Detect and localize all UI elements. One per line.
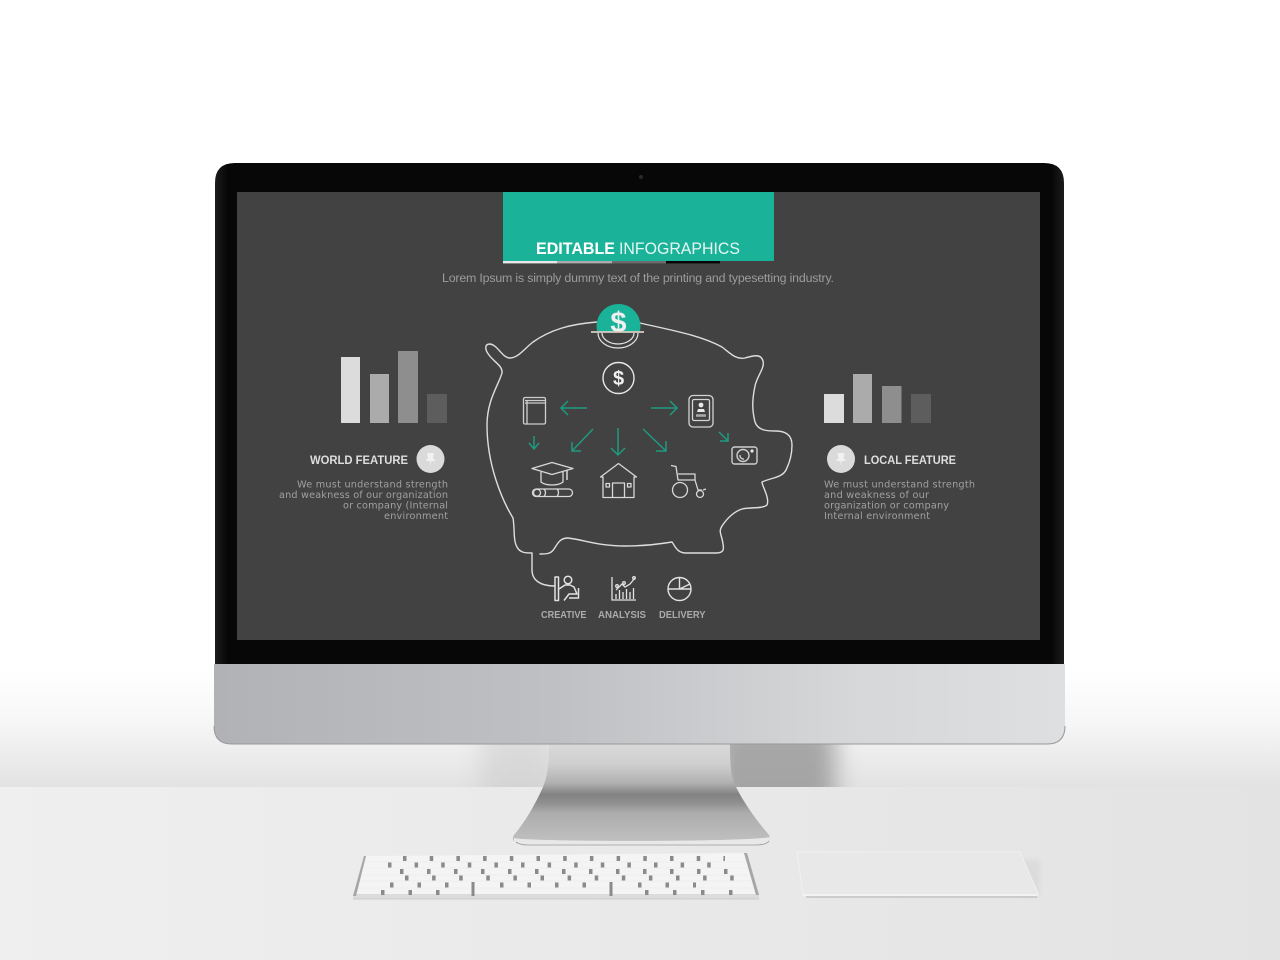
icon: analysis chart — [612, 577, 636, 600]
text block: world: We must understand strength — [297, 480, 448, 490]
arrows — [529, 401, 728, 455]
icon: coin in slot: $ — [610, 307, 627, 339]
icon: pin — [416, 445, 444, 473]
title banner — [503, 192, 774, 263]
title: EDITABLE — [536, 240, 615, 258]
heading: world feature: WORLD FEATURE — [310, 453, 408, 467]
panel: world feature — [279, 351, 448, 522]
text block: world: or company (Internal — [343, 500, 448, 512]
title: INFOGRAPHICS — [619, 240, 740, 258]
keyboard key rows — [356, 862, 755, 888]
trackpad — [797, 852, 1040, 897]
icon: dollar circle — [603, 362, 634, 394]
text block: local: and weakness of our — [824, 490, 929, 501]
icon: phone profile — [689, 396, 713, 427]
icon: house — [600, 464, 636, 498]
bar chart: world — [341, 351, 447, 423]
text block: local — [824, 480, 975, 522]
icon: delivery pie — [668, 578, 691, 600]
banner underline — [503, 261, 720, 263]
subtitle: Lorem Ipsum is simply dummy text of the printing and typesetting industry. — [442, 271, 834, 285]
label: analysis: ANALYSIS — [598, 610, 646, 621]
webcam — [639, 175, 643, 179]
icon: graduation cap — [532, 462, 573, 496]
text block: world: and weakness of our organization — [279, 490, 448, 501]
icon: camera — [732, 447, 757, 464]
icon: wheelchair — [671, 466, 706, 498]
panel: local feature — [824, 374, 975, 522]
icon: pin — [827, 445, 855, 473]
wall shadow behind monitor — [478, 744, 849, 787]
bar chart: local — [824, 374, 931, 423]
screen — [237, 192, 1040, 640]
monitor stand — [513, 744, 770, 845]
keyboard key gaps — [381, 858, 736, 896]
monitor body — [214, 163, 1065, 744]
text block: local: Internal environment — [824, 511, 930, 522]
heading: local feature: LOCAL FEATURE — [864, 453, 956, 467]
desk surface — [0, 787, 1280, 960]
icon: creative person at desk — [555, 576, 578, 600]
piggy bank outline — [486, 322, 792, 554]
text block: local: We must understand strength — [824, 480, 975, 490]
wire to creative icon — [532, 553, 555, 586]
label: delivery: DELIVERY — [659, 610, 706, 621]
text block: world: environment — [384, 511, 448, 522]
icon: book — [524, 398, 546, 424]
keyboard — [353, 853, 759, 899]
label: creative: CREATIVE — [541, 610, 587, 621]
monitor chin — [214, 664, 1065, 744]
icon: dollar circle: $ — [613, 368, 624, 390]
monitor bezel — [215, 163, 1064, 664]
text block: local: organization or company — [824, 500, 949, 512]
text block: world — [279, 480, 448, 522]
icon: coin in slot — [591, 304, 644, 348]
